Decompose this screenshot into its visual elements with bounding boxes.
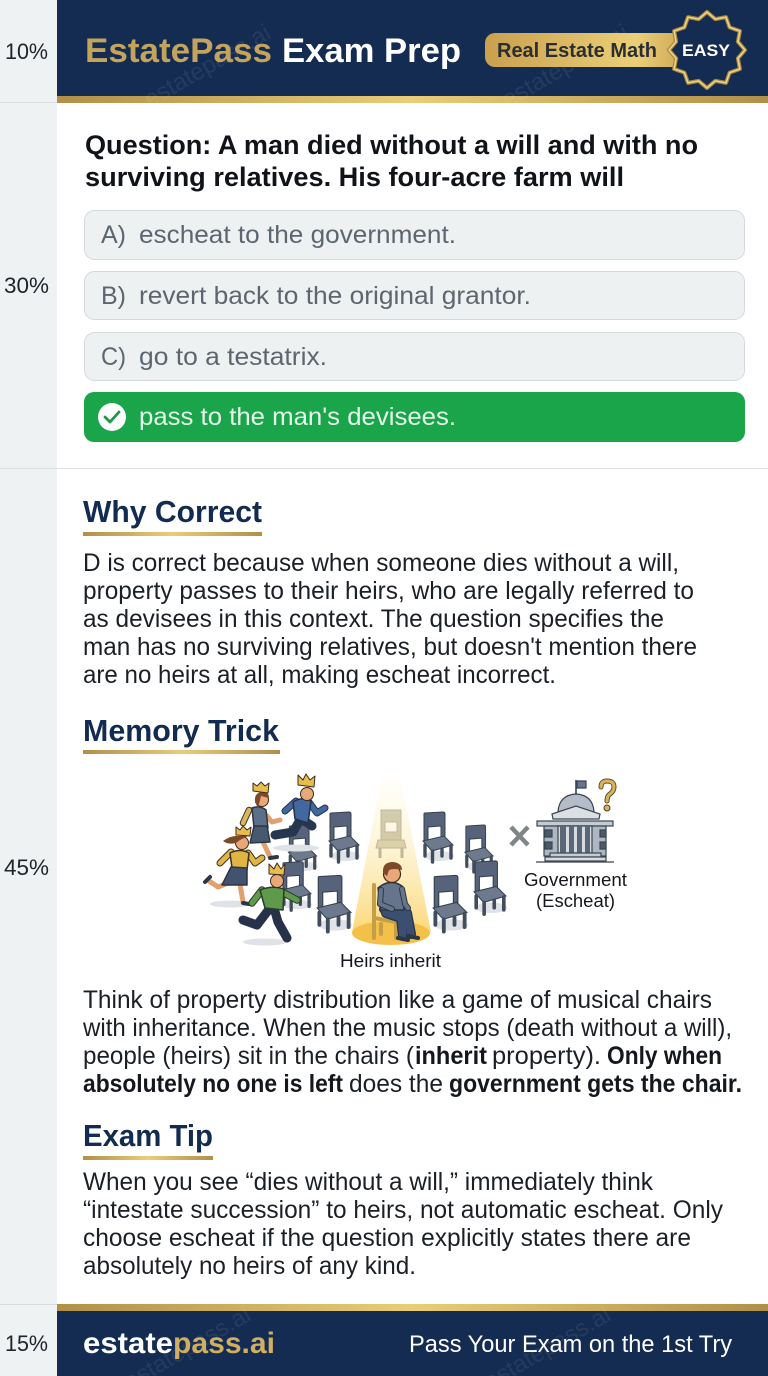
memory trick text: Think of property distribution like a game of musical chairs	[83, 986, 712, 1014]
option B: revert back to the original grantor.	[139, 282, 531, 310]
header title: Exam Prep	[282, 32, 461, 70]
header title: EstatePass	[85, 32, 272, 70]
runner: green top	[243, 863, 297, 946]
spotlight	[352, 775, 431, 945]
option B: B)	[101, 282, 126, 310]
why correct text: D is correct because when someone dies without a will,	[83, 549, 679, 577]
footer banner	[57, 1301, 768, 1376]
question text: Question: A man died without a will and with no	[85, 130, 698, 160]
subject pill: Real Estate Math	[497, 40, 657, 62]
option D: correct answer	[84, 392, 745, 442]
heading: Why Correct: Why Correct	[83, 494, 262, 529]
footer logo	[83, 1327, 275, 1360]
ghost chair	[376, 810, 406, 858]
icon: question mark	[601, 781, 614, 811]
runner: yellow top	[205, 826, 262, 908]
badge: EASY	[669, 12, 745, 88]
subject pill	[485, 33, 700, 67]
memory trick text: inherit	[415, 1042, 488, 1070]
option A	[84, 210, 744, 260]
caption: Government (Escheat)	[524, 870, 627, 911]
badge: EASY: EASY	[682, 41, 731, 60]
label: 45%: 45%	[4, 855, 49, 880]
exam tip text: “intestate succession” to heirs, not automatic escheat. Only	[83, 1196, 723, 1224]
memory trick text: people (heirs) sit in the chairs (	[83, 1042, 415, 1070]
exam tip text: absolutely no heirs of any kind.	[83, 1252, 416, 1280]
icon: check mark	[98, 403, 126, 431]
seated man	[374, 862, 418, 940]
caption: Government (Escheat): (Escheat)	[536, 891, 615, 911]
label: 30%: 30%	[4, 273, 49, 298]
illustration: musical chairs	[205, 774, 627, 971]
option C: C)	[101, 343, 126, 371]
option B	[84, 272, 744, 320]
option A: A)	[101, 221, 126, 249]
footer logo: estate	[83, 1327, 173, 1360]
exam tip text	[83, 1168, 723, 1280]
option C	[84, 332, 744, 380]
empty chairs	[282, 812, 507, 932]
option D: correct answer: pass to the man's devisees.	[139, 403, 456, 431]
heading: Exam Tip: Exam Tip	[83, 1118, 213, 1153]
memory trick text: absolutely no one is left	[83, 1070, 344, 1098]
runner: blue	[273, 774, 325, 852]
header title	[85, 32, 461, 70]
question text	[85, 130, 698, 192]
why correct text: as devisees in this context. The question specifies the	[83, 605, 664, 633]
footer tagline: Pass Your Exam on the 1st Try	[409, 1331, 732, 1358]
exam tip text: choose escheat if the question explicitly states there are	[83, 1224, 691, 1252]
exam tip text: When you see “dies without a will,” immediately think	[83, 1168, 653, 1196]
memory trick text: does the	[349, 1070, 443, 1098]
question text: surviving relatives. His four-acre farm will	[85, 162, 624, 192]
caption: Government (Escheat): Government	[524, 870, 627, 890]
memory trick text: government gets the chair.	[449, 1070, 742, 1098]
runner: grey top	[243, 782, 280, 858]
memory trick text: property).	[492, 1042, 601, 1070]
footer logo: pass.ai	[173, 1327, 275, 1360]
label: 10%: 10%	[5, 39, 48, 64]
icon: X mark	[511, 827, 528, 845]
memory trick text	[82, 986, 742, 1098]
header banner	[57, 0, 768, 113]
memory trick text: Only when	[607, 1042, 722, 1070]
memory trick text: with inheritance. When the music stops (death without a will),	[82, 1014, 732, 1042]
why correct text: man has no surviving relatives, but doesn't mention there	[83, 633, 697, 661]
why correct text	[83, 549, 697, 689]
why correct text: are no heirs at all, making escheat incorrect.	[83, 661, 556, 689]
label: 15%: 15%	[5, 1331, 48, 1356]
option A: escheat to the government.	[139, 221, 456, 249]
heading: Memory Trick: Memory Trick	[83, 713, 280, 748]
icon: government building	[536, 780, 614, 862]
why correct text: property passes to their heirs, who are legally referred to	[83, 577, 694, 605]
left gutter	[0, 0, 57, 1376]
watermark: estatepass.ai	[498, 19, 633, 113]
watermark: estatepass.ai	[140, 19, 275, 113]
caption: Heirs inherit: Heirs inherit	[340, 951, 441, 971]
option C: go to a testatrix.	[139, 343, 327, 371]
